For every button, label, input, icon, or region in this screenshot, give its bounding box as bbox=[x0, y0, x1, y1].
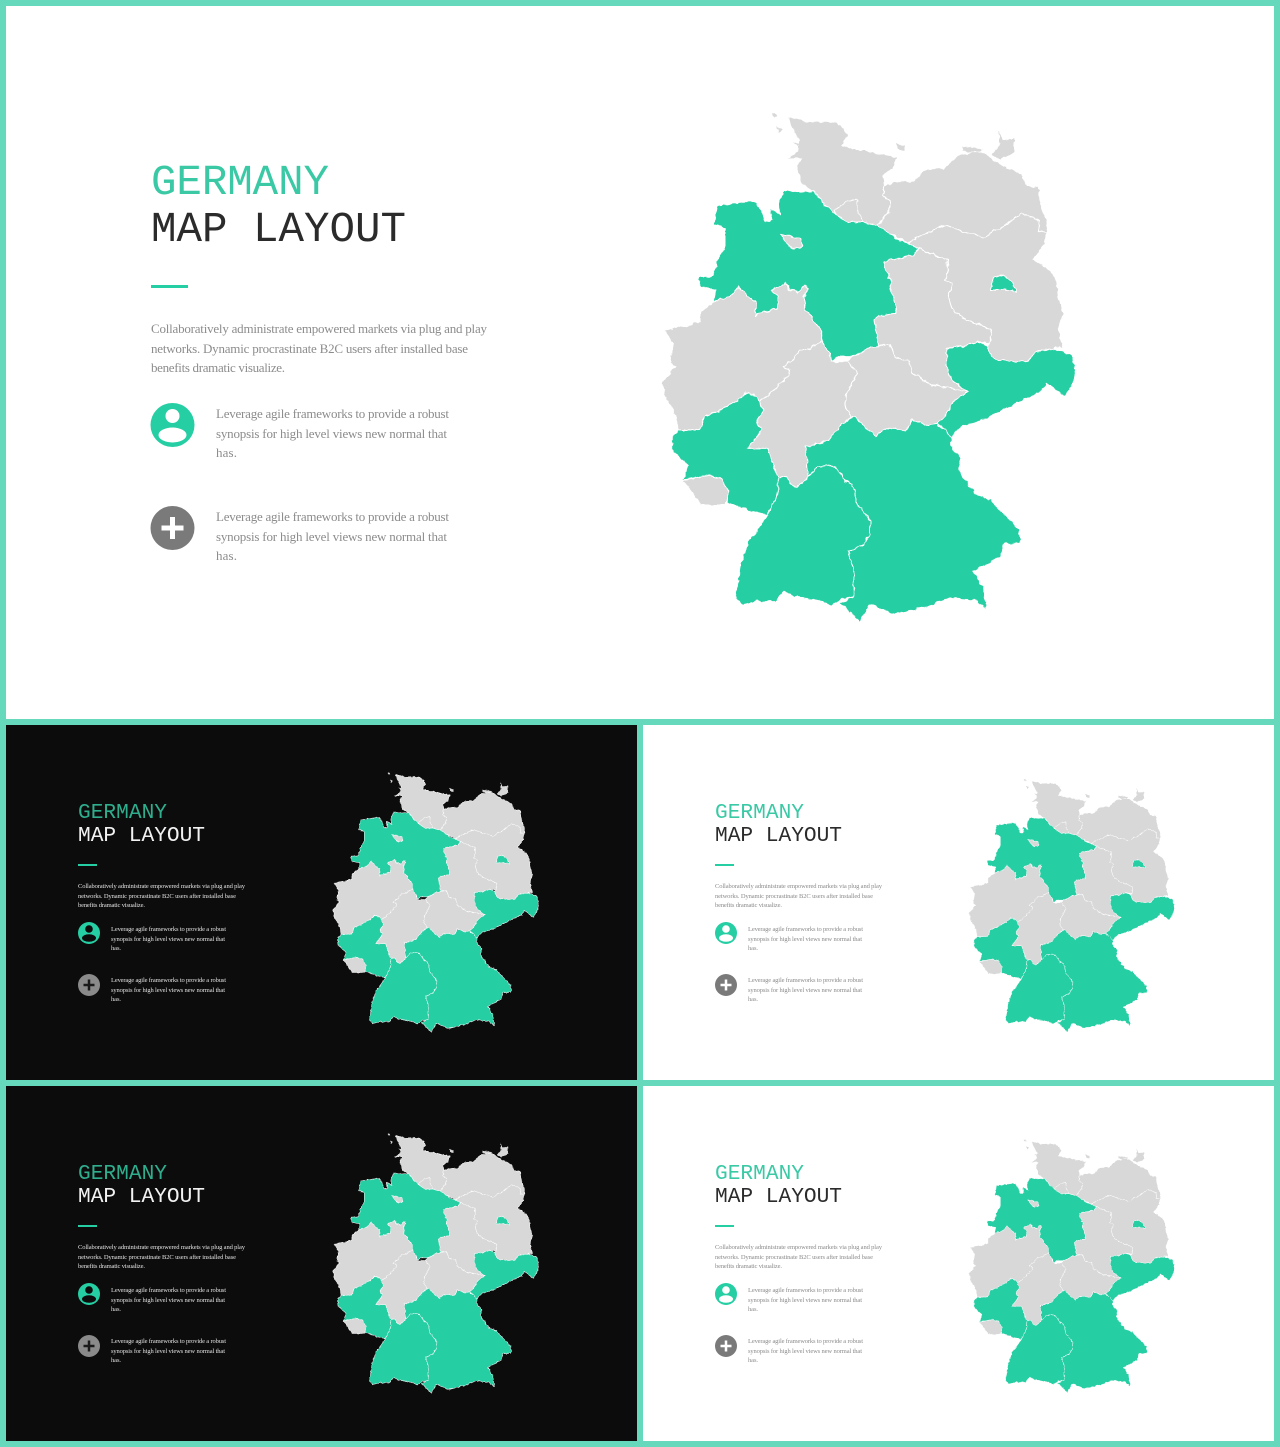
region: Baden-Wurttemberg bbox=[736, 465, 870, 605]
title: MAP LAYOUT bbox=[715, 824, 842, 848]
accent rule bbox=[715, 864, 734, 866]
intro text block bbox=[151, 321, 488, 375]
text block: second point bbox=[111, 1338, 226, 1364]
region: Bavaria bbox=[805, 417, 1020, 622]
icon: plus bbox=[715, 1335, 737, 1357]
title: MAP LAYOUT bbox=[78, 1185, 205, 1209]
intro text block: benefits dramatic visualize. bbox=[151, 360, 285, 375]
icon: plus bbox=[78, 974, 100, 996]
text block: first point: synopsis for high level views new normal that bbox=[748, 1297, 862, 1304]
panel: dark slide row 2 bbox=[6, 725, 637, 1080]
title bbox=[715, 1162, 842, 1209]
text block: first point: Leverage agile frameworks to provide a robust bbox=[748, 926, 863, 933]
text block: first point: has. bbox=[111, 1306, 121, 1313]
title: MAP LAYOUT bbox=[78, 824, 205, 848]
map: Germany on dark bbox=[333, 773, 539, 1032]
intro text block bbox=[715, 883, 883, 909]
icon: person bbox=[78, 1283, 100, 1305]
region: Saarland bbox=[683, 475, 728, 505]
text block: first point bbox=[111, 1287, 226, 1313]
text block: first point: synopsis for high level views new normal that bbox=[748, 936, 862, 943]
title: GERMANY bbox=[78, 801, 167, 825]
text block: second point: Leverage agile frameworks to provide a robust bbox=[111, 1338, 226, 1345]
title: Germany map layout: MAP LAYOUT bbox=[151, 206, 406, 254]
icon: person bbox=[715, 1283, 737, 1305]
intro text block: Collaboratively administrate empowered markets via plug and play bbox=[78, 1244, 246, 1251]
region: Thuringia bbox=[845, 343, 968, 437]
text block: second point: Leverage agile frameworks to provide a robust bbox=[111, 977, 226, 984]
text block: second point: synopsis for high level views new normal that bbox=[111, 987, 225, 994]
intro text block: Collaboratively administrate empowered markets via plug and play bbox=[151, 321, 488, 336]
title: GERMANY bbox=[715, 801, 804, 825]
text block: second point: has. bbox=[216, 548, 237, 563]
text block: first point bbox=[111, 926, 226, 952]
region: Berlin bbox=[990, 275, 1017, 292]
text block: second point: synopsis for high level views new normal that bbox=[748, 987, 862, 994]
region: Lower Saxony bbox=[698, 189, 918, 362]
intro text block bbox=[78, 883, 246, 909]
text block: first point: Leverage agile frameworks to provide a robust bbox=[111, 926, 226, 933]
intro text block: Collaboratively administrate empowered markets via plug and play bbox=[78, 883, 246, 890]
text block: first point bbox=[216, 406, 449, 460]
title: MAP LAYOUT bbox=[715, 1185, 842, 1209]
text block: second point: has. bbox=[748, 996, 758, 1003]
intro text block: networks. Dynamic procrastinate B2C users after installed base bbox=[78, 893, 236, 900]
text block: first point bbox=[748, 926, 863, 952]
intro text block bbox=[715, 1244, 883, 1270]
text block: first point: Leverage agile frameworks to provide a robust bbox=[216, 406, 449, 421]
region: Schleswig-Holstein bbox=[787, 117, 897, 226]
title: GERMANY bbox=[715, 1162, 804, 1186]
intro text block: Collaboratively administrate empowered markets via plug and play bbox=[715, 1244, 883, 1251]
text block: second point: Leverage agile frameworks to provide a robust bbox=[748, 1338, 863, 1345]
region: Hesse bbox=[748, 342, 858, 488]
accent rule bbox=[78, 864, 97, 866]
region: Hamburg bbox=[835, 199, 863, 223]
panel: dark slide row 3 bbox=[6, 1086, 637, 1441]
title bbox=[78, 1162, 205, 1209]
intro text block: networks. Dynamic procrastinate B2C users after installed base bbox=[78, 1254, 236, 1261]
title bbox=[715, 801, 842, 848]
text block: second point bbox=[748, 977, 863, 1003]
region: Saxony bbox=[937, 342, 1076, 437]
text block: second point: Leverage agile frameworks to provide a robust bbox=[216, 509, 449, 524]
text block: first point: has. bbox=[748, 945, 758, 952]
region: Bremen bbox=[780, 234, 803, 249]
map: Germany on white bbox=[969, 1140, 1175, 1392]
text block: second point: synopsis for high level views new normal that bbox=[216, 529, 447, 544]
intro text block: networks. Dynamic procrastinate B2C users after installed base bbox=[715, 1254, 873, 1261]
accent rule bbox=[78, 1225, 97, 1227]
text block: first point: Leverage agile frameworks to provide a robust bbox=[111, 1287, 226, 1294]
text block: first point: has. bbox=[748, 1306, 758, 1313]
text block: second point: has. bbox=[111, 996, 121, 1003]
intro text block: benefits dramatic visualize. bbox=[78, 1263, 145, 1270]
intro text block: benefits dramatic visualize. bbox=[78, 902, 145, 909]
text block: first point: synopsis for high level views new normal that bbox=[111, 936, 225, 943]
title bbox=[78, 801, 205, 848]
region: North Rhine-Westphalia bbox=[662, 283, 822, 430]
icon: plus bbox=[715, 974, 737, 996]
panel: white slide row 2 bbox=[643, 725, 1274, 1080]
region: Rhineland-Palatinate bbox=[672, 392, 778, 515]
panel: white slide row 3 bbox=[643, 1086, 1274, 1441]
region: Saxony-Anhalt bbox=[874, 248, 992, 392]
title: GERMANY bbox=[78, 1162, 167, 1186]
intro text block: networks. Dynamic procrastinate B2C users after installed base bbox=[715, 893, 873, 900]
icon: plus bbox=[78, 1335, 100, 1357]
intro text block: benefits dramatic visualize. bbox=[715, 902, 782, 909]
text block: second point bbox=[111, 977, 226, 1003]
text block: second point bbox=[748, 1338, 863, 1364]
text block: first point: synopsis for high level views new normal that bbox=[216, 426, 447, 441]
region: Mecklenburg bbox=[877, 152, 1048, 243]
title: Germany map layout: GERMANY bbox=[151, 159, 329, 207]
text block: second point: has. bbox=[111, 1357, 121, 1364]
accent rule bbox=[715, 1225, 734, 1227]
panel: large white slide bbox=[6, 6, 1274, 719]
text block: second point: synopsis for high level views new normal that bbox=[748, 1348, 862, 1355]
text block: second point bbox=[216, 509, 449, 563]
text block: second point: Leverage agile frameworks to provide a robust bbox=[748, 977, 863, 984]
intro text block: networks. Dynamic procrastinate B2C users after installed base bbox=[151, 341, 468, 356]
icon: person bbox=[715, 922, 737, 944]
map: Germany large bbox=[662, 113, 1076, 622]
text block: first point: has. bbox=[216, 445, 237, 460]
icon: plus bbox=[150, 506, 194, 550]
intro text block: benefits dramatic visualize. bbox=[715, 1263, 782, 1270]
text block: second point: has. bbox=[748, 1357, 758, 1364]
map: Germany on white bbox=[969, 779, 1175, 1032]
intro text block bbox=[78, 1244, 246, 1270]
icon: person bbox=[150, 403, 194, 447]
text block: second point: synopsis for high level views new normal that bbox=[111, 1348, 225, 1355]
text block: first point bbox=[748, 1287, 863, 1313]
region: Baltic and North Sea islands bbox=[772, 113, 1015, 160]
intro text block: Collaboratively administrate empowered markets via plug and play bbox=[715, 883, 883, 890]
icon: person bbox=[78, 922, 100, 944]
title: Germany map layout bbox=[151, 159, 406, 254]
text block: first point: synopsis for high level views new normal that bbox=[111, 1297, 225, 1304]
text block: first point: has. bbox=[111, 945, 121, 952]
map: Germany on dark bbox=[333, 1134, 539, 1393]
region: Brandenburg bbox=[908, 213, 1063, 362]
text block: first point: Leverage agile frameworks to provide a robust bbox=[748, 1287, 863, 1294]
accent rule bbox=[151, 285, 188, 288]
